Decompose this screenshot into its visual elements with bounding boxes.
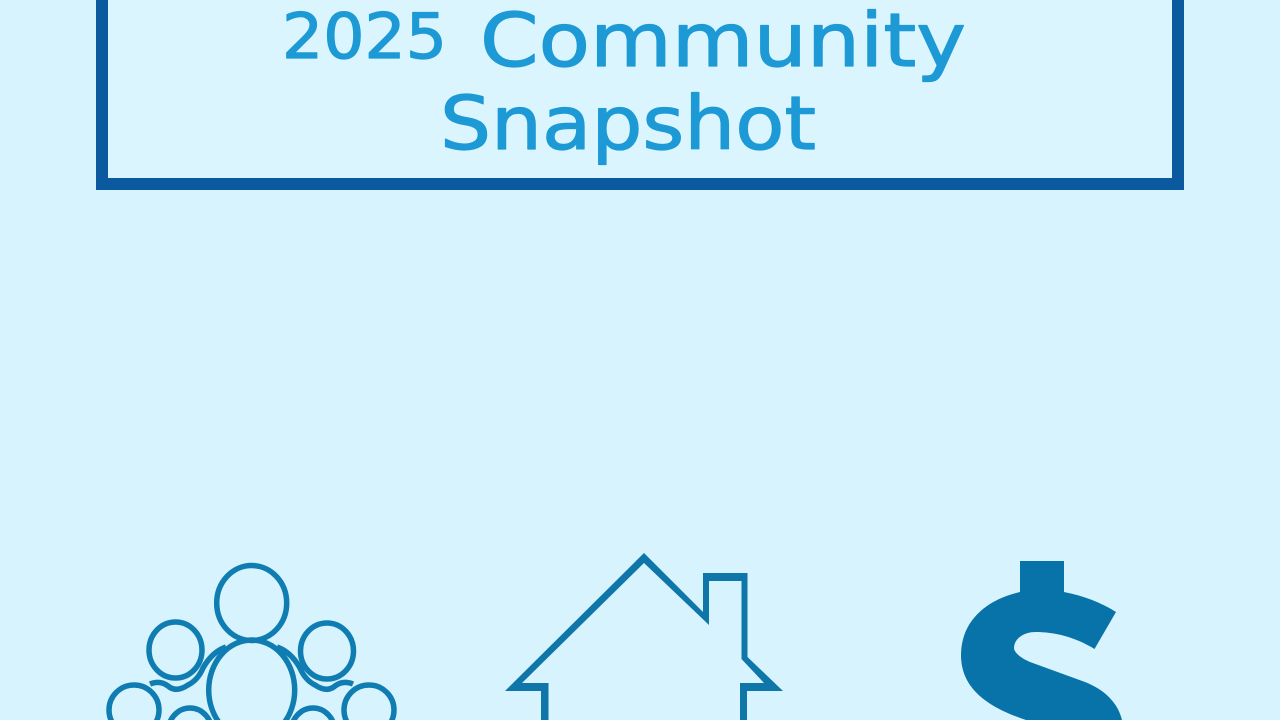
icon: dollar sign xyxy=(961,561,1122,720)
title: Community xyxy=(480,0,966,84)
icon: house xyxy=(505,553,783,720)
title frame xyxy=(102,0,1178,184)
title: Snapshot xyxy=(440,81,816,167)
title xyxy=(282,0,966,167)
icon: group of people xyxy=(109,566,394,720)
title: 2025 xyxy=(282,0,447,73)
